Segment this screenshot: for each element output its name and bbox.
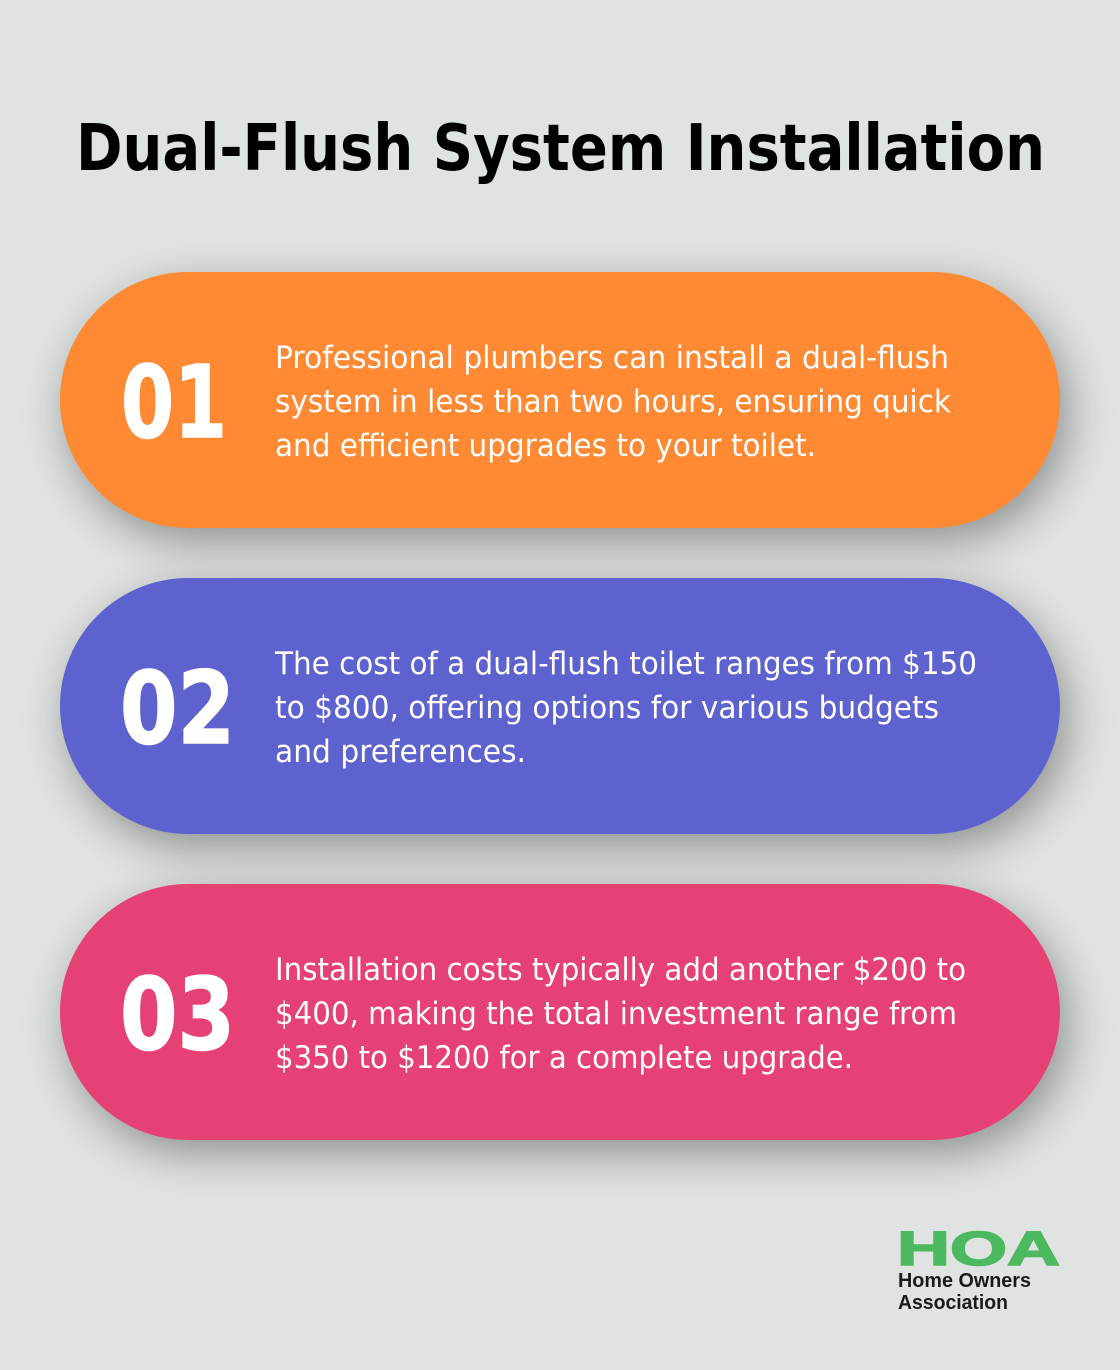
logo wordmark: Association bbox=[898, 1292, 1008, 1314]
text block: step 02: The cost of a dual-flush toilet ranges from $150 bbox=[274, 646, 977, 682]
text block: step 02: to $800, offering options for various budgets bbox=[275, 690, 939, 726]
panel: step 02 bbox=[60, 578, 1060, 834]
text block: step 03: $400, making the total investment range from bbox=[275, 996, 957, 1032]
number 01: 01 bbox=[121, 344, 227, 461]
text block: step 03 bbox=[275, 952, 966, 1076]
pill background pink bbox=[60, 884, 1060, 1140]
panel: step 03 bbox=[60, 884, 1060, 1140]
logo wordmark bbox=[898, 1270, 1031, 1314]
pill background blue bbox=[60, 578, 1060, 834]
text block: step 03: $350 to $1200 for a complete upgrade. bbox=[275, 1040, 853, 1076]
text block: step 01 bbox=[275, 340, 951, 464]
logo: Home Owners Association bbox=[897, 1223, 1060, 1314]
logo mark HOA: HOA bbox=[897, 1223, 1060, 1276]
pill background orange bbox=[60, 272, 1060, 528]
text block: step 02 bbox=[274, 646, 977, 770]
text block: step 03: Installation costs typically add another $200 to bbox=[275, 952, 966, 988]
panel: step 01 bbox=[60, 272, 1060, 528]
text block: step 01: Professional plumbers can install a dual-flush bbox=[275, 340, 949, 376]
number 03: 03 bbox=[120, 956, 235, 1073]
number 02: 02 bbox=[120, 650, 235, 767]
logo wordmark: Home Owners bbox=[898, 1270, 1031, 1292]
text block: step 01: and efficient upgrades to your toilet. bbox=[275, 428, 816, 464]
text block: step 02: and preferences. bbox=[275, 734, 526, 770]
text block: step 01: system in less than two hours, ensuring quick bbox=[275, 384, 951, 420]
